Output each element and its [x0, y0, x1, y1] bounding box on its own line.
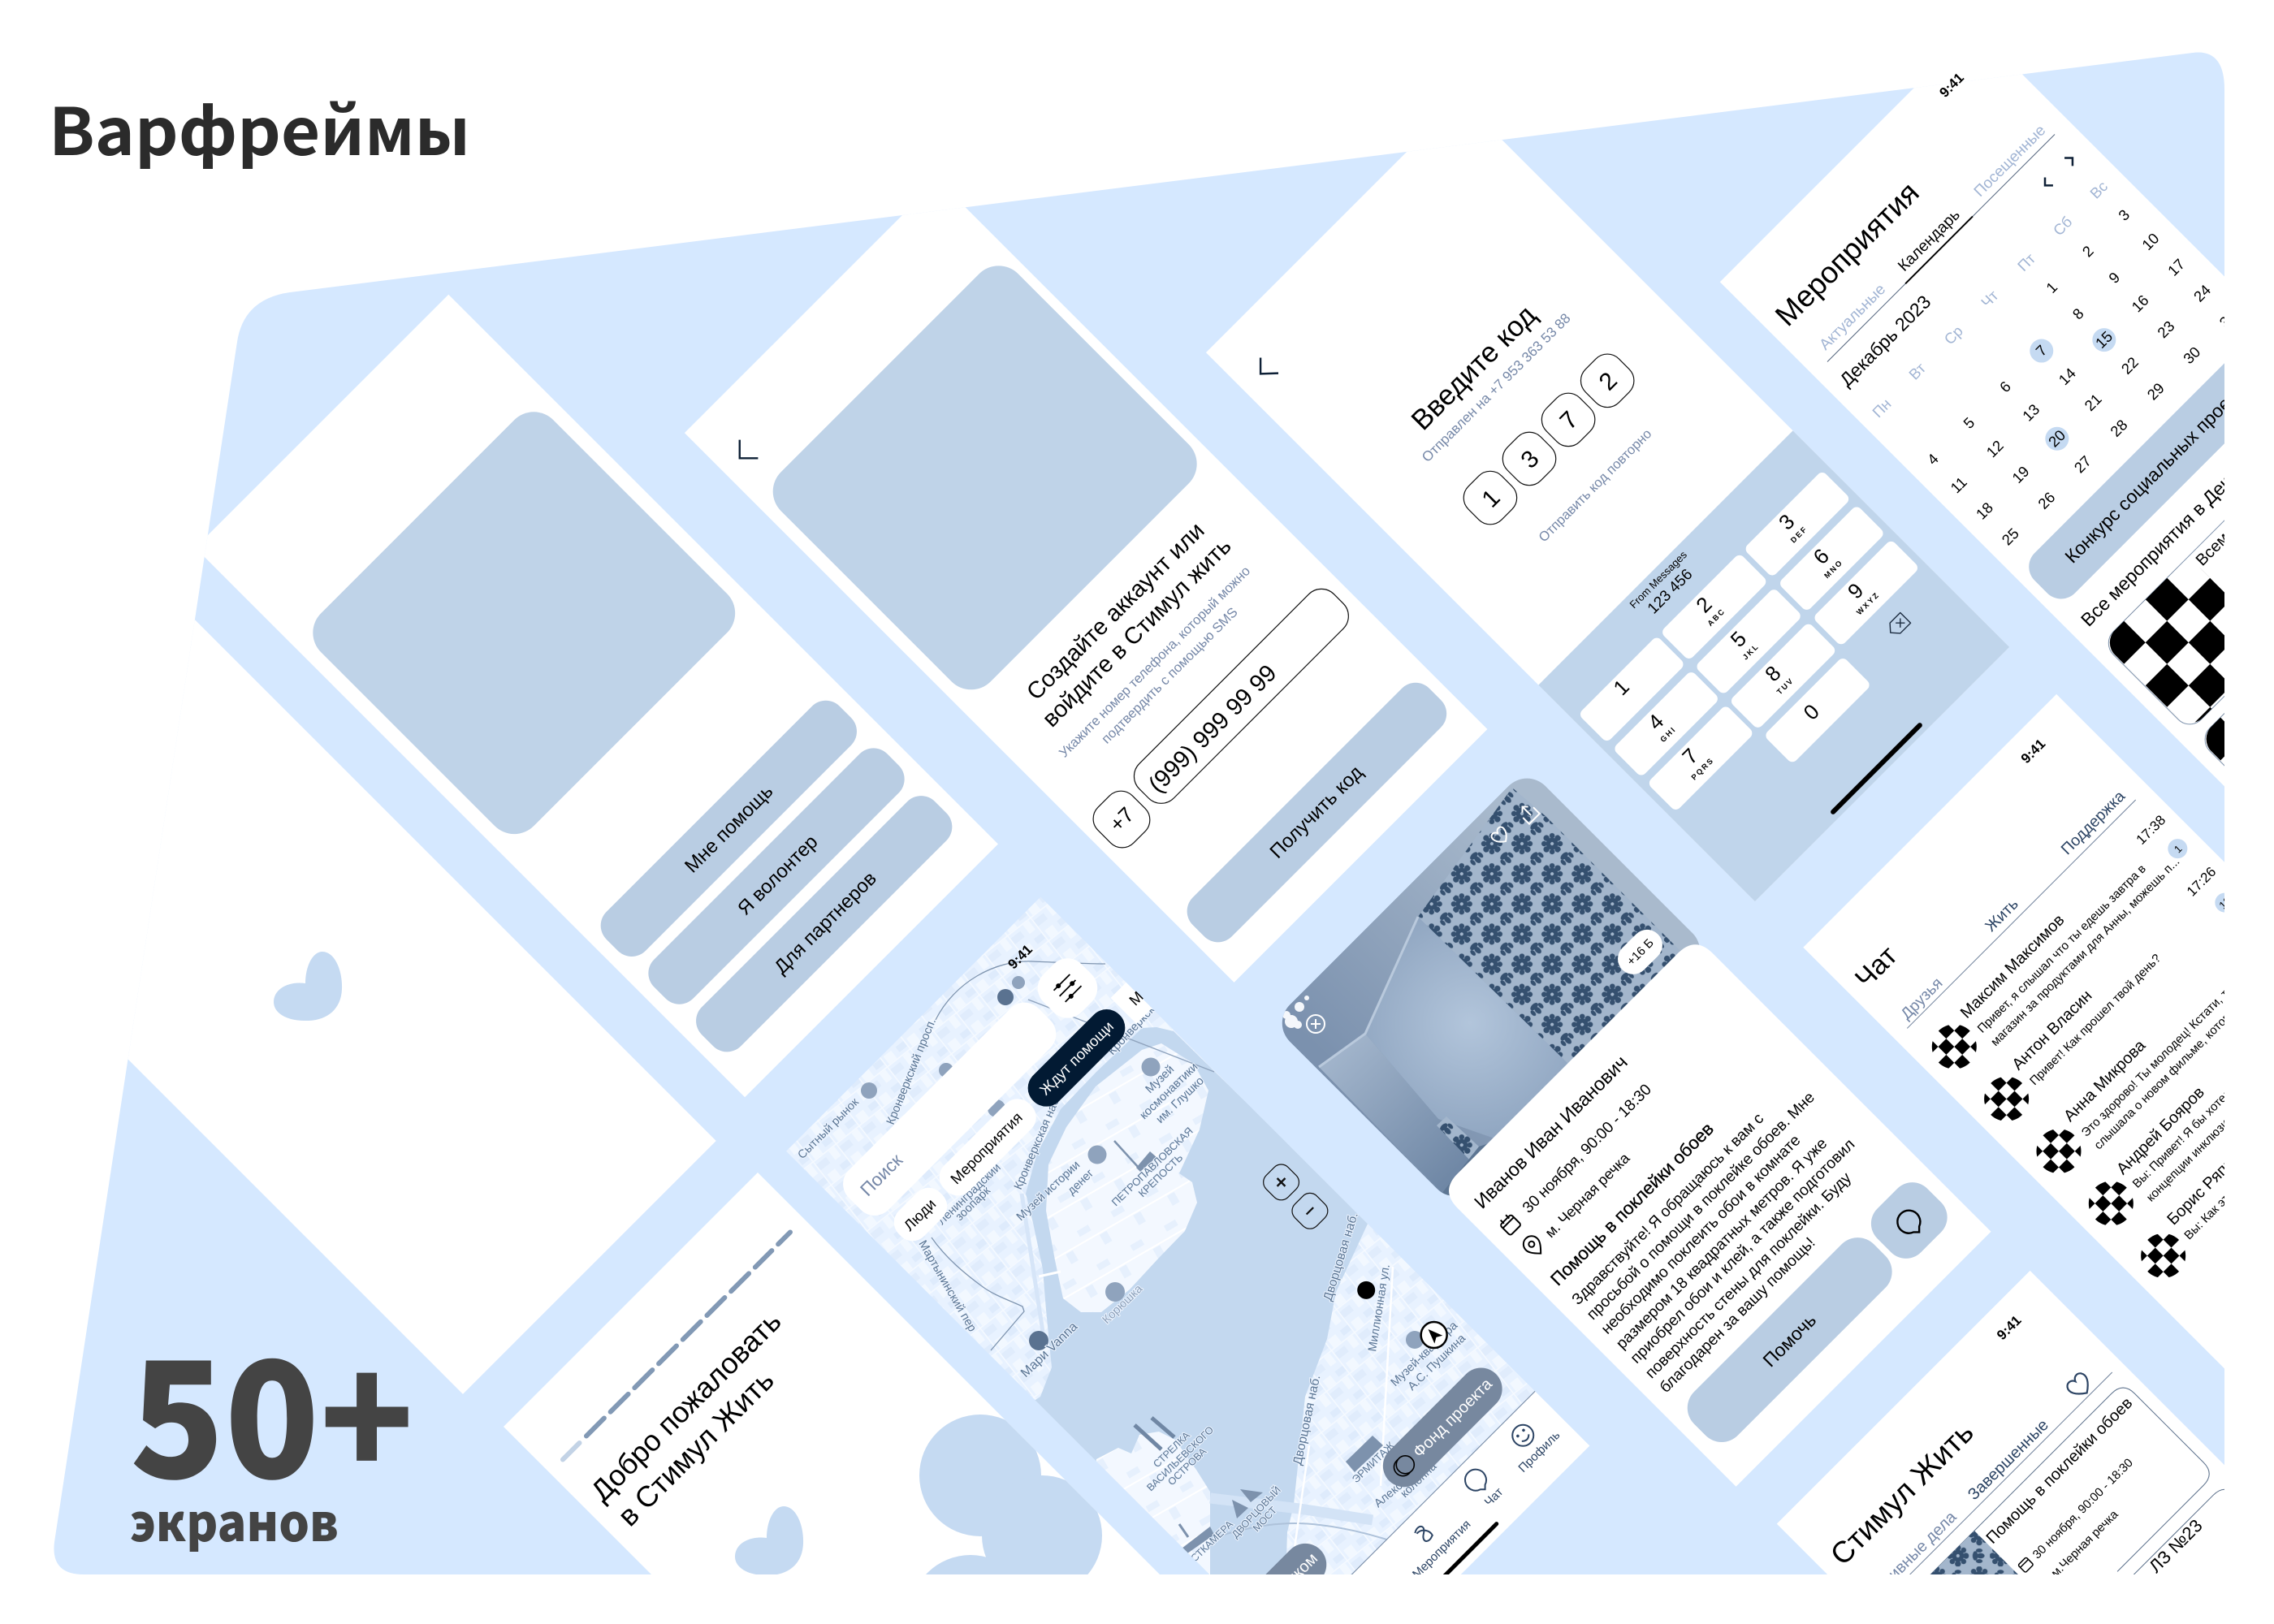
screen: chat [1803, 694, 2274, 1497]
code boxes: 7 [1555, 406, 1584, 435]
calendar grid: 14 [2056, 365, 2079, 388]
heading: Введите код [1405, 299, 1542, 436]
calendar grid: 6 [1996, 378, 2014, 395]
screen: tasks [1777, 1271, 2274, 1624]
request body: приобрел обои и клей, а также подготовил [1628, 1136, 1858, 1367]
tabs: Актуальные [1817, 281, 1889, 354]
chat row: Антон: Антон Власин [2008, 987, 2096, 1073]
tabs: Друзья [1897, 974, 1947, 1023]
map labels: Кронверкская [1105, 994, 1166, 1058]
icon: photo share [1517, 801, 1540, 824]
chip: waiting for help [1021, 1002, 1132, 1114]
keyboard: From Messages [1628, 548, 1689, 611]
request body: просьбой о помощи в поклейке обоев. Мне [1584, 1089, 1818, 1324]
calendar grid: 22 [2118, 353, 2142, 378]
calendar grid: 31 [2216, 307, 2240, 330]
calendar grid: Ср [1940, 322, 1966, 348]
task card 1: Помощь в поклейки обоев [1983, 1394, 2136, 1548]
icon: photo plus [1307, 1015, 1325, 1033]
pill: project fund [1374, 1359, 1511, 1496]
points pill: +16 Б [1624, 936, 1657, 969]
button: help [1678, 1229, 1901, 1452]
map labels: Музей-квартира [1389, 1319, 1461, 1389]
button: get code: Получить код [1266, 762, 1368, 863]
chat row: Андрей: Андрей Бояров [2113, 1083, 2208, 1178]
home indicator [1423, 1524, 1497, 1597]
banner button: Конкурс социальных проектов [2060, 366, 2261, 567]
heading: в Стимул Жить [611, 1363, 780, 1532]
map labels: ПЕТРОПАВЛОВСКАЯ [1109, 1125, 1195, 1208]
chat row: Максим: 17:38 [2133, 812, 2168, 848]
calendar grid: 13 [2019, 400, 2043, 425]
task card 2: ЛЗ №23 [2145, 1515, 2207, 1577]
metro station: м. Черная речка [1541, 1149, 1633, 1241]
map labels: Кронверкский просп. [884, 1017, 939, 1126]
button: partners [696, 796, 952, 1052]
tab: chat [1461, 1465, 1506, 1510]
keyboard: TUV [1775, 676, 1796, 697]
tabs [1811, 119, 2055, 361]
keyboard: PQRS [1690, 756, 1716, 782]
stat: number of screens: экранов [130, 1483, 339, 1557]
screen: welcome [504, 1173, 1169, 1616]
icon: large heart [910, 1415, 1102, 1616]
chat row: Максим: магазин за продуктами для Анны, можешь п... [1988, 855, 2182, 1049]
points pill [1611, 923, 1669, 981]
calendar grid: 30 [2180, 343, 2203, 367]
heading: войдите в Стимул жить [1038, 533, 1237, 732]
icon: photo heart outline [1490, 826, 1511, 847]
water [1015, 1027, 1368, 1583]
keyboard: WXYZ [1855, 590, 1882, 617]
map background [731, 853, 1624, 1616]
icon: back chevron [739, 440, 759, 460]
chat row: Антон: 12 [2216, 895, 2233, 911]
image placeholder [301, 400, 746, 845]
status time: 9:41 [2018, 736, 2048, 767]
date: 30 ноября, 90:00 - 18:30 [1520, 1082, 1655, 1216]
chat row: Максим: Максим Максимов [1957, 911, 2068, 1022]
screen: enter code [1206, 98, 2009, 901]
chat row: Борис: Борис Ряпин [2164, 1148, 2245, 1229]
calendar grid: 9 [2105, 269, 2123, 287]
section heading: Все мероприятия в Декабре [2077, 442, 2265, 630]
chip: people [887, 1181, 954, 1248]
chat row: Анна: слышала о новом фильме, который [2091, 999, 2245, 1152]
code boxes [1463, 354, 1634, 525]
keyboard: MNO [1822, 558, 1845, 581]
phone input [1134, 588, 1349, 804]
banner button [2021, 329, 2274, 607]
tabs: Поддержка [2058, 788, 2129, 858]
keyboard [1538, 430, 2009, 901]
location button [1416, 1316, 1452, 1354]
keyboard: 5 [1726, 626, 1751, 652]
card [1440, 936, 1991, 1487]
map labels: Ленинградский [936, 1161, 1004, 1228]
icon: calendar [1498, 1212, 1521, 1236]
tab: chat: Чат [1482, 1485, 1506, 1510]
calendar grid: 3 [2115, 206, 2133, 224]
status time: events screen: 9:41 [1936, 70, 1967, 101]
event card 2 [2198, 508, 2274, 827]
map labels: ВАСИЛЬЕВСКОГО [1144, 1424, 1216, 1493]
screen: sign up [685, 179, 1487, 983]
map labels: КРЕПОСТЬ [1136, 1151, 1185, 1199]
calendar grid: 4 [1924, 450, 1942, 468]
icon: heart on blank screen [274, 952, 342, 1021]
calendar grid: 29 [2143, 379, 2168, 404]
button: need help [601, 700, 857, 957]
request body: Здравствуйте! Я обращаюсь к вам с [1569, 1110, 1767, 1308]
map marker dot [1354, 1277, 1379, 1302]
tab: profile: Профиль [1515, 1428, 1563, 1475]
map labels [796, 994, 1469, 1578]
chat row: Антон: 17:26 [2184, 864, 2219, 900]
code boxes: 3 [1516, 445, 1545, 474]
image placeholder [762, 254, 1208, 701]
screen: map overlay [809, 909, 1591, 1624]
map labels: Музей истории [1014, 1159, 1083, 1224]
calendar grid: 8 [2069, 304, 2087, 322]
calendar grid: 24 [2190, 281, 2214, 305]
calendar grid: Пт [2014, 249, 2039, 274]
tabs: Активные дела [1867, 1508, 1961, 1601]
chat row: Анна: Анна Микрова [2060, 1036, 2150, 1125]
calendar grid: 15 [2092, 328, 2116, 352]
keyboard: ABC [1706, 607, 1727, 628]
name: Иванов Иван Иванович [1470, 1052, 1632, 1212]
chip: events: Мероприятия [947, 1108, 1026, 1187]
keyboard: 4 [1643, 709, 1668, 735]
status time: 9:41 [1005, 942, 1035, 972]
tabs: Завершенные [1965, 1416, 2052, 1504]
calendar grid: 17 [2164, 255, 2188, 279]
icon: heart on welcome screen [735, 1506, 803, 1575]
chat row: Борис: Вы: Как это [2181, 1187, 2237, 1242]
map labels: МОСТ [1251, 1505, 1279, 1534]
calendar grid: 2 [2079, 242, 2097, 260]
heading: Добро пожаловать [584, 1304, 788, 1508]
icon: month arrows [2041, 154, 2077, 189]
map labels: Мари Vanna [1018, 1320, 1080, 1380]
screen: request details [1410, 905, 1991, 1487]
map labels: Александровская [1372, 1439, 1454, 1510]
calendar grid: 1 [2043, 279, 2060, 296]
tab bar [1311, 1391, 1589, 1624]
map labels: А.С. Пушкина [1406, 1332, 1469, 1393]
heading: Создайте аккаунт или [1022, 517, 1209, 706]
keyboard: 2 [1691, 592, 1717, 617]
keyboard: 1 [1608, 675, 1634, 700]
phone hint: Отправлен на +7 953 363 53 88 [1418, 310, 1574, 465]
keyboard: 3 [1774, 509, 1800, 534]
chat row: Максим: 1 [2172, 843, 2185, 855]
calendar grid: 12 [1982, 437, 2007, 460]
calendar grid: 27 [2071, 452, 2095, 476]
chat row: Максим: Привет, я слышал что ты едешь завтра в [1975, 862, 2149, 1036]
heading: Мероприятия [1769, 175, 1926, 332]
map landmarks [1114, 1141, 1383, 1553]
map labels: СТРЕЛКА [1151, 1429, 1192, 1470]
map labels: Миллионная ул. [1366, 1263, 1393, 1353]
title: Варфреймы [49, 80, 470, 175]
fortress island [1046, 1043, 1208, 1312]
chat row: Антон [1973, 863, 2242, 1133]
pill: project fund: Фонд проекта [1410, 1375, 1497, 1462]
country code box [1093, 791, 1150, 848]
map labels: КУНСТКАМЕРА [1174, 1518, 1236, 1578]
heading: Чат [1849, 940, 1904, 995]
map pins [861, 976, 1424, 1350]
photo: room with wallpaper [1218, 731, 1787, 1234]
progress bar [563, 1232, 790, 1459]
calendar grid: Вс [2086, 178, 2111, 202]
map labels: Дворцовая наб. [1321, 1211, 1361, 1302]
calendar grid: Сб [2050, 213, 2075, 239]
keyboard: GHI [1659, 725, 1678, 745]
filter button [1030, 950, 1105, 1026]
keyboard: DEF [1789, 525, 1809, 545]
screen: events calendar [1720, 75, 2224, 786]
calendar grid: 11 [1947, 473, 1970, 496]
request body: поверхность стены для поклейки. Буду [1642, 1169, 1855, 1382]
calendar grid: 20 [2045, 426, 2069, 451]
search box [835, 995, 1064, 1224]
calendar grid: 10 [2138, 230, 2162, 253]
chat row: Андрей [2077, 1034, 2274, 1241]
map labels: Музей [1143, 1063, 1177, 1096]
map labels: Сытный рынок [796, 1095, 862, 1162]
roads [932, 961, 1397, 1559]
calendar grid: 25 [1999, 525, 2022, 548]
icon: back chevron [1259, 357, 1278, 375]
map labels: ЭРМИТАЖ [1350, 1439, 1397, 1485]
keyboard: JKL [1741, 642, 1762, 662]
pill: secondary: Пешком [1265, 1549, 1321, 1605]
chat row: Максим [1922, 810, 2196, 1086]
tabs: Посещенные [1971, 122, 2049, 201]
calendar grid: Вт [1905, 359, 1930, 383]
chip: more [1111, 981, 1153, 1024]
map labels: ОСТРОВА [1165, 1445, 1209, 1488]
month label: Декабрь 2023 [1835, 291, 1935, 391]
button: chat [1862, 1173, 1956, 1268]
map labels: Дворцовая наб. [1290, 1374, 1323, 1466]
vasilievsky spit [1088, 1432, 1210, 1583]
code boxes: 2 [1594, 367, 1623, 395]
map labels: денег [1066, 1167, 1096, 1198]
keyboard: 9 [1843, 578, 1868, 603]
calendar grid: 5 [1960, 414, 1978, 432]
task card 2 [2095, 1483, 2274, 1624]
chip: more: М [1126, 988, 1147, 1009]
event card 1: Всем [2193, 529, 2233, 569]
chat row: Анна: Это здорово! Ты молодец! Кстати, ты [2079, 981, 2237, 1140]
button: volunteer [648, 748, 905, 1004]
button: help: Помочь [1758, 1309, 1820, 1371]
button: need help: Мне помощь [681, 780, 777, 877]
chat row: Андрей: концепции инклюзии [2144, 1112, 2237, 1205]
calendar grid: 26 [2034, 489, 2058, 512]
task card 1: 30 ноября, 90:00 - 18:30 [2030, 1456, 2136, 1561]
request body: благодарен за вашу помощь! [1657, 1234, 1818, 1397]
keyboard: 7 [1677, 744, 1703, 769]
map labels: Корюшка [1100, 1282, 1146, 1327]
icon: favourites heart [2064, 1371, 2095, 1401]
pill: secondary [1249, 1535, 1335, 1621]
map labels: колонна [1399, 1459, 1440, 1501]
zoom in button [1260, 1160, 1303, 1204]
icon: pin [1520, 1233, 1546, 1259]
calendar grid: 23 [2154, 317, 2178, 341]
calendar grid [1868, 178, 2240, 550]
status time: 9:41 [1994, 1312, 2025, 1343]
calendar grid: Чт [1978, 287, 2002, 311]
button: get code [1187, 682, 1447, 942]
tabs: Календарь [1895, 206, 1964, 275]
tab: events: Мероприятия [1410, 1518, 1473, 1581]
chat row: Антон: Привет! Как прошел твой день? [2027, 952, 2164, 1088]
heading: Стимул Жить [1824, 1415, 1980, 1571]
map labels: им. Глушко [1154, 1074, 1207, 1126]
calendar grid: 19 [2008, 463, 2033, 486]
zoom out button [1288, 1189, 1332, 1233]
search box: Поиск [856, 1150, 906, 1200]
phone input: (999) 999 99 99 [1143, 659, 1282, 798]
chip: people: Люди [900, 1195, 939, 1234]
button: partners: Для партнеров [770, 867, 881, 978]
task card 1: м.Черная речка [2048, 1507, 2121, 1580]
map labels: зоопарк [953, 1184, 993, 1224]
task card 1 [1891, 1382, 2215, 1624]
chat row: Андрей: Вы: Привет! Я бы хотел узнать о [2130, 1051, 2270, 1191]
calendar grid: Пн [1869, 395, 1895, 421]
keyboard: 123 456 [1645, 566, 1696, 617]
request title: Помощь в поклейки обоев [1546, 1118, 1718, 1289]
map labels: Кронверкская наб. [1012, 1093, 1064, 1192]
keyboard: 0 [1798, 699, 1824, 725]
map labels: Мартынинский пер [916, 1238, 979, 1334]
resend link: Отправить код повторно [1536, 426, 1654, 545]
request body: размером 18 квадратных метров. Я уже [1613, 1135, 1831, 1353]
map labels: ДВОРЦОВЫЙ [1229, 1484, 1283, 1540]
country code box: +7 [1105, 802, 1139, 836]
request body: необходимо поклеить обои в комнате [1598, 1132, 1804, 1338]
button: volunteer: Я волонтер [733, 831, 822, 920]
calendar grid: 18 [1973, 499, 1996, 523]
calendar grid: 7 [2032, 342, 2050, 360]
map labels: космонавтики [1138, 1060, 1200, 1122]
stat: number of screens: 50+ [130, 1291, 414, 1525]
keyboard: 6 [1809, 543, 1834, 569]
tab: profile [1497, 1410, 1563, 1475]
calendar grid: 21 [2081, 391, 2105, 414]
description: Укажите номер телефона, который можно [1056, 563, 1253, 760]
chat row: Анна [2025, 963, 2250, 1189]
event card 1 [2102, 412, 2274, 731]
tabs [1864, 1358, 2112, 1606]
calendar grid: 16 [2128, 292, 2152, 315]
keyboard: 8 [1760, 661, 1786, 686]
chip: events [932, 1092, 1043, 1203]
tabs [1891, 784, 2136, 1028]
code boxes: 1 [1476, 485, 1506, 513]
tabs: Жить [1982, 895, 2022, 935]
chat row: Борис [2128, 1148, 2268, 1287]
chip: waiting for help: Ждут помощи [1036, 1017, 1117, 1099]
tab: events [1392, 1500, 1473, 1581]
screen: blank with heart [128, 620, 716, 1394]
calendar grid: 28 [2107, 416, 2131, 440]
description: подтвердить с помощью SMS [1098, 604, 1241, 746]
screen: role selection [195, 295, 998, 1097]
